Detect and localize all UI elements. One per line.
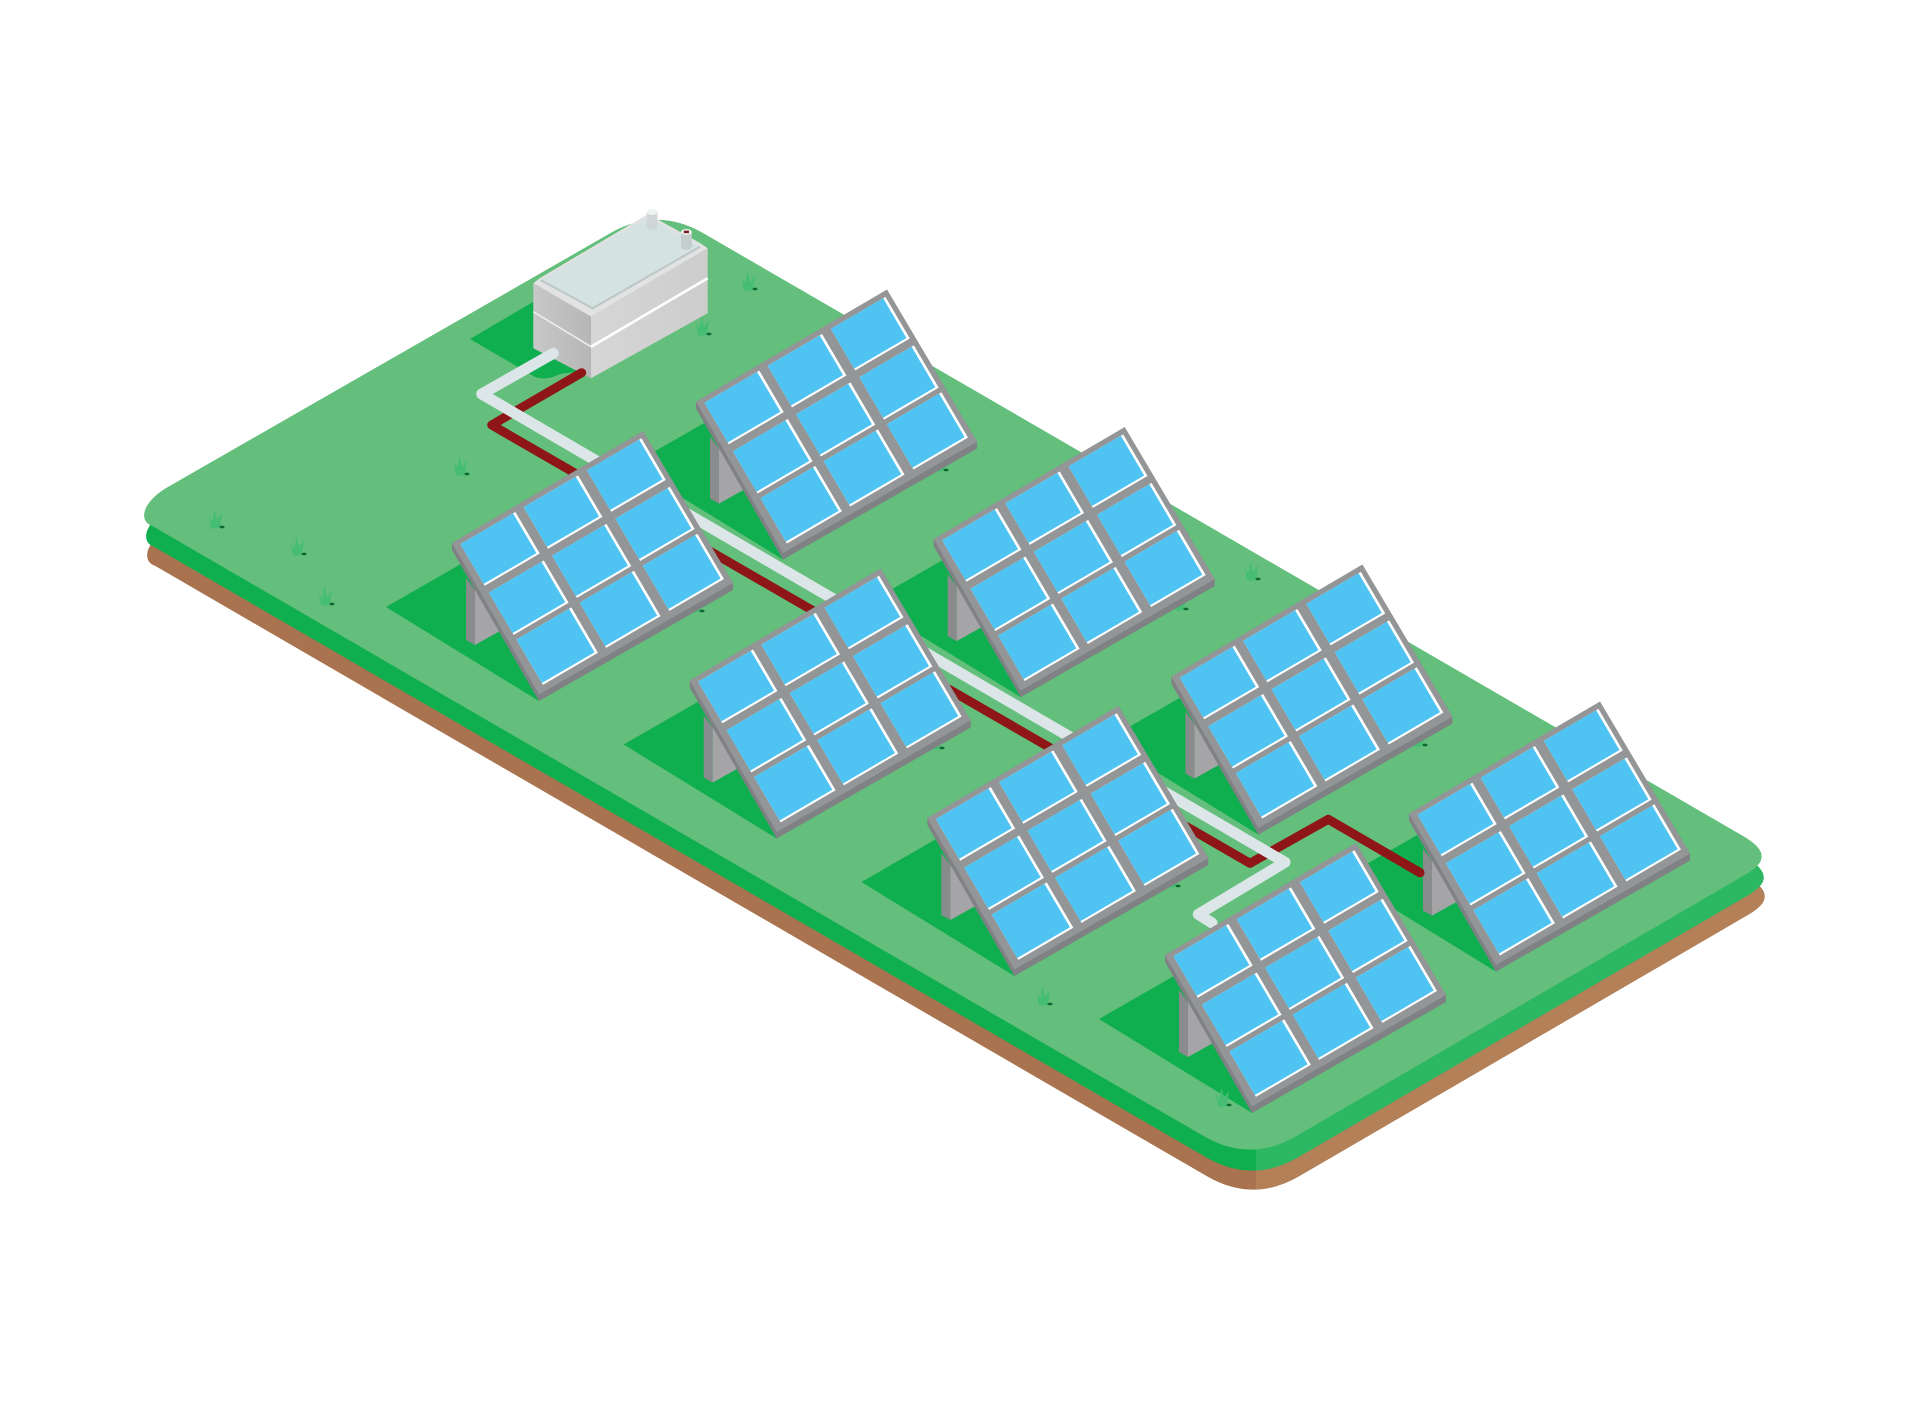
solar panel, back row 3 — [934, 427, 1215, 697]
battery lid lower edge — [541, 247, 700, 308]
battery terminal: front post — [681, 229, 692, 250]
grass tufts scattered on the ground — [209, 271, 1428, 1107]
battery right face — [591, 248, 708, 378]
solar panel, front row 8 — [1165, 843, 1446, 1113]
solar panel, front row 1 — [452, 431, 733, 701]
isometric solar farm scene — [144, 209, 1765, 1190]
battery shadow on the ground — [470, 302, 590, 378]
dark green turf edge of the ground slab — [146, 525, 1764, 1171]
battery lid — [541, 217, 700, 308]
panel shadows on the ground — [386, 412, 1587, 1113]
solar panel, front row 4 — [690, 568, 971, 838]
battery terminal: rear post — [647, 209, 657, 230]
red power cable — [492, 373, 1420, 873]
battery groove, left face — [533, 312, 591, 347]
solar panel, back row 2 — [696, 290, 977, 560]
battery top rim — [533, 214, 708, 317]
solar panel, front row 6 — [927, 706, 1208, 976]
white power cable — [482, 353, 1285, 923]
solar panel, back row 5 — [1171, 565, 1452, 835]
grass surface of the ground slab — [144, 220, 1762, 1150]
soil layer of the ground slab — [147, 545, 1765, 1190]
solar panel, back row 7 — [1409, 702, 1690, 972]
battery storage unit — [533, 209, 708, 378]
red cable end at the last panel leg — [1405, 864, 1420, 873]
battery groove, right face — [591, 278, 708, 347]
battery left face — [533, 283, 591, 378]
